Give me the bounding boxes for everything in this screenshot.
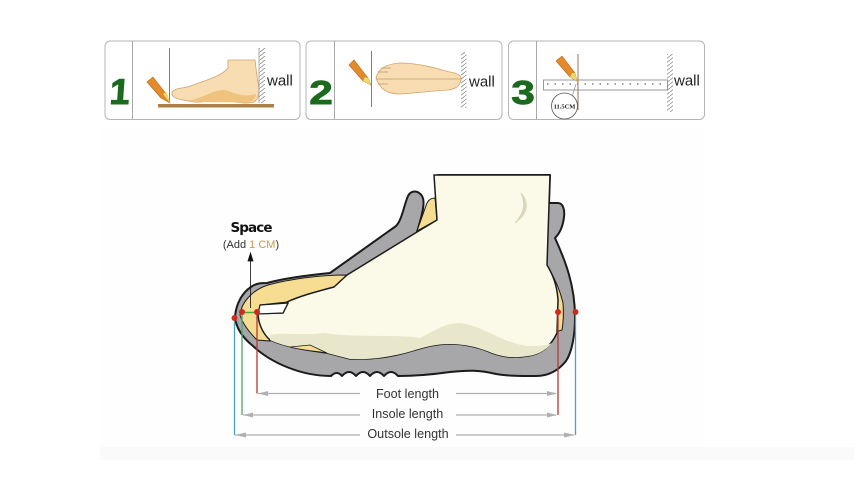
insole: collar lining <box>417 198 437 231</box>
label: wall: wall <box>266 72 293 90</box>
insole: toe area <box>240 275 347 341</box>
label: add 1 cm: (Add 1 CM) <box>223 239 279 251</box>
measurement lines <box>232 309 578 441</box>
shoe sole and upper <box>235 175 575 376</box>
heading: Space: Space <box>230 220 272 236</box>
foot length row <box>258 387 557 401</box>
step number 3: 3 <box>511 75 535 112</box>
foot arch shading <box>270 323 552 359</box>
insole length row <box>243 407 557 421</box>
space annotation <box>223 220 279 308</box>
step number 2: 2 <box>309 75 333 112</box>
arrow: upward <box>248 253 253 308</box>
insole: heel lining <box>548 267 563 332</box>
icon: top view of foot against wall <box>349 51 466 108</box>
panel: step 2 <box>306 41 502 120</box>
outsole length row <box>235 427 575 441</box>
step number 1: 1 <box>108 71 131 112</box>
panel: step 1 <box>105 41 300 120</box>
magnifier reading: 11.5CM <box>554 104 575 110</box>
icon: side view of foot against wall <box>147 48 274 108</box>
shoe and foot diagram <box>235 175 575 376</box>
insole length row: Insole length <box>372 407 443 421</box>
icon: ruler, pencil and wall <box>544 54 673 119</box>
outsole length row: Outsole length <box>367 427 449 441</box>
foot length row: Foot length <box>376 387 439 401</box>
big toe <box>258 303 288 314</box>
panel: step 3 <box>508 41 704 120</box>
label: wall: wall <box>468 74 495 90</box>
insole: under the toes <box>290 345 327 353</box>
point markers <box>232 309 578 321</box>
ankle bone <box>515 193 526 223</box>
label: wall: wall <box>673 72 700 90</box>
foot <box>258 175 558 359</box>
